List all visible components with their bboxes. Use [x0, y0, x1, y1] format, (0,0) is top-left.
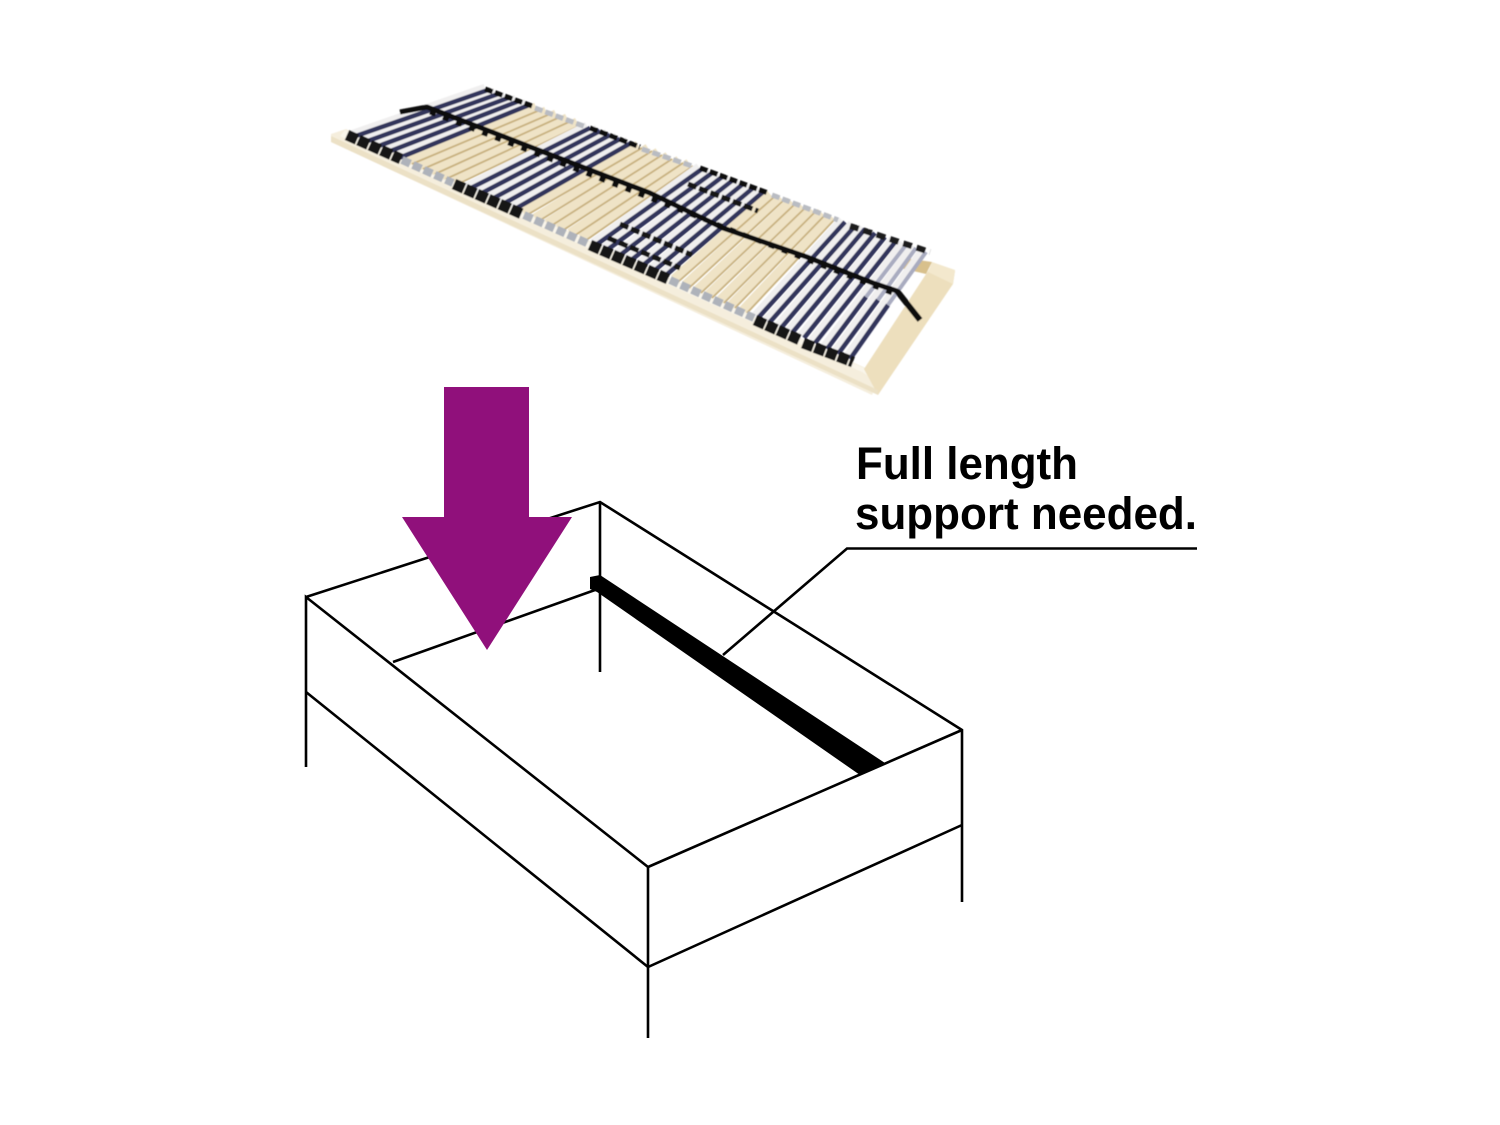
bed frame line drawing: [306, 502, 962, 1038]
inner black clips on the double slats: [608, 184, 758, 268]
callout text: [855, 438, 1197, 539]
callout leader line: [723, 548, 1197, 655]
callout text: support needed.: [855, 488, 1197, 539]
central support beam: [590, 575, 885, 775]
callout text: Full length: [856, 438, 1078, 489]
front edge clips: [347, 135, 853, 362]
purple downward arrow: [402, 387, 572, 650]
wooden frame rails: [331, 129, 955, 395]
wood slats: [408, 107, 835, 313]
sprung dark slats: [350, 88, 926, 359]
slatted bed base product image: [331, 88, 955, 395]
central black strap: [400, 107, 920, 320]
back edge clips: [485, 89, 930, 252]
